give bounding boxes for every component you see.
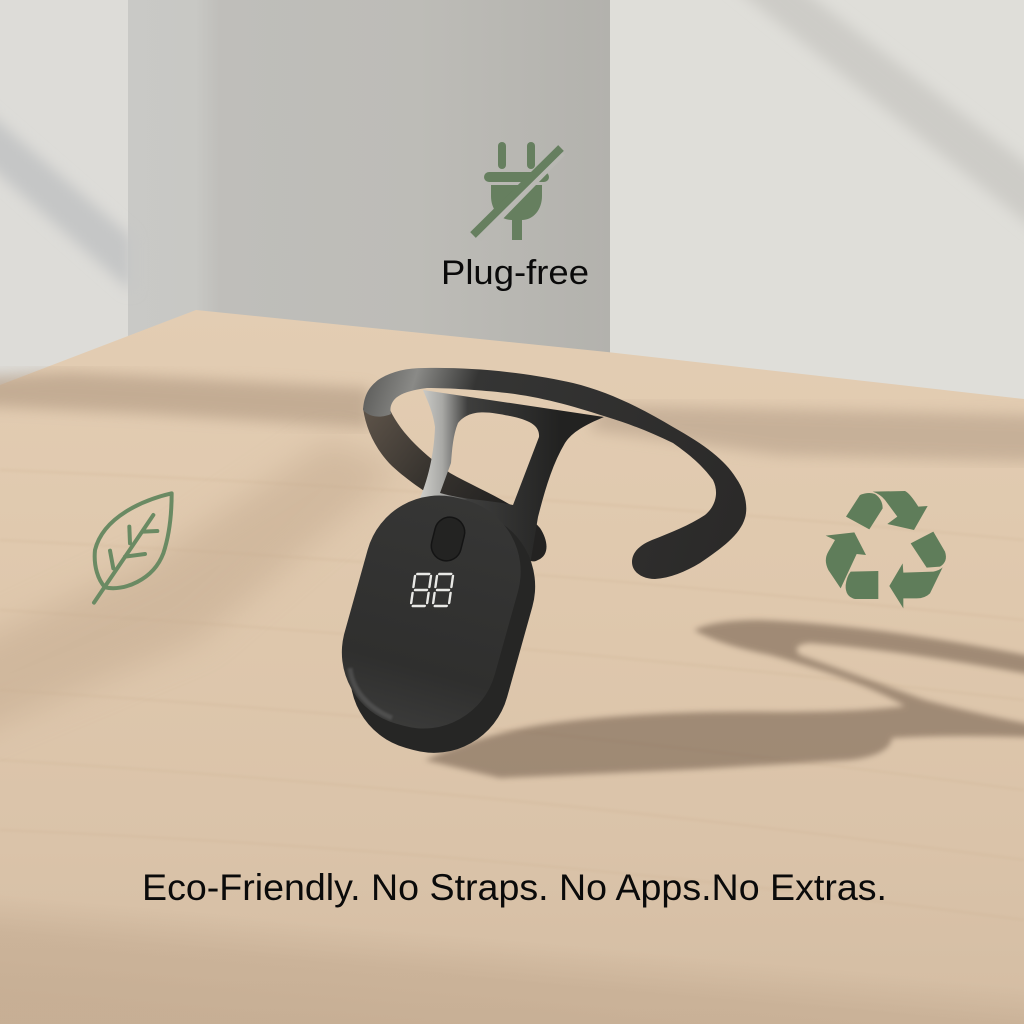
tagline: Eco-Friendly. No Straps. No Apps.No Extras. [142, 867, 887, 908]
icon: recycle symbol [826, 491, 946, 608]
device cast shadow [425, 620, 1024, 778]
segment display 88 [411, 574, 453, 606]
device: posture neck trainer [325, 368, 746, 770]
back wall [0, 0, 1024, 420]
neck band rear arm [363, 408, 546, 561]
device rear shell [333, 491, 553, 770]
device front face [325, 478, 538, 746]
wooden table [0, 310, 1024, 1024]
label: Plug-free: Plug-free [441, 254, 589, 292]
icon: crossed-out plug [473, 142, 561, 240]
connecting strut [410, 390, 604, 565]
face edge highlight [350, 668, 392, 718]
neck band [363, 368, 746, 579]
power button [428, 514, 468, 564]
icon: leaf [94, 493, 172, 603]
